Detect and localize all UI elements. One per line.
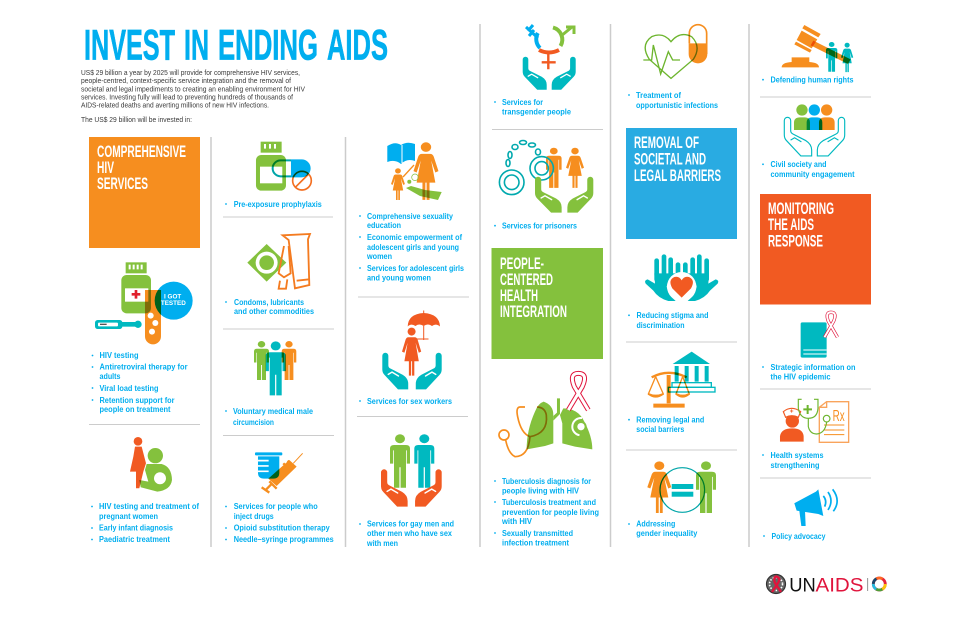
text: inject drugs list: Opioid substitution therapy [234, 524, 330, 532]
panel: comprehensive HIV services heading [89, 137, 200, 248]
icon: woman, child and book [387, 142, 442, 200]
panel: monitoring the AIDS response heading: THE AIDS [768, 215, 814, 234]
text: adolescent list [359, 212, 464, 282]
panel: people who inject drugs [225, 452, 334, 544]
icon: scales and courthouse [648, 352, 715, 408]
text: inject drugs list [225, 502, 334, 544]
text: condoms: and other commodities [234, 307, 314, 316]
icon: book and ribbon [801, 312, 837, 358]
text: transgender: transgender people [502, 108, 572, 116]
panel: people-centered health integration heading [492, 248, 603, 359]
panel: HIV testing [92, 262, 193, 414]
text: pre-exposure prophylaxis: Pre-exposure prophylaxis [234, 200, 322, 209]
icon: bottle, test tube and test: TESTED [161, 300, 186, 307]
text: gender inequality: gender inequality [636, 529, 698, 538]
icon: bottle, capsule and no sign [256, 142, 311, 191]
panel: prisoners [494, 140, 593, 230]
text: legal barriers: Removing legal and [636, 416, 704, 424]
title [84, 22, 388, 69]
icon: hands holding heart [645, 254, 718, 301]
panel: condoms and lubricants [225, 234, 314, 316]
text: circumcision [225, 407, 313, 427]
intro text: US$ 29 billion a year by 2025 will provide for comprehensive HIV services, [81, 68, 300, 77]
panel: monitoring the AIDS response heading: RESPONSE [768, 232, 823, 250]
panel: removal of societal and legal barriers heading: LEGAL BARRIERS [634, 166, 721, 185]
text: HIV testing list: adults [100, 372, 121, 381]
panel: gay men [359, 434, 454, 548]
panel: removal of societal and legal barriers heading: REMOVAL OF [634, 133, 699, 152]
text: circumcision: circumcision [233, 418, 274, 427]
icon: bottle, test tube and test: I GOT [164, 293, 181, 300]
text: HIV testing list: people on treatment [100, 405, 171, 414]
text: human rights: Defending human rights [770, 76, 854, 84]
panel: human rights [762, 25, 854, 85]
text: legal barriers: social barriers [636, 425, 685, 434]
text: civil society: Civil society and [770, 160, 827, 169]
panel: removal of societal and legal barriers heading: SOCIETAL AND [634, 150, 706, 168]
text: health systems: Health systems [770, 451, 824, 460]
panel: monitoring the AIDS response heading: MONITORING [768, 199, 834, 218]
text: gay men: with men [366, 539, 398, 548]
text: adolescent list: and young women [367, 274, 431, 282]
icon: megaphone [794, 489, 837, 526]
icon: bottle, test tube and test [95, 262, 193, 344]
icon: woman, man and equals sign [647, 461, 716, 513]
icon: two men in hands [381, 434, 442, 507]
intro text: services. Investing fully will lead to preventing hundreds of thousands of [81, 92, 294, 102]
text: gender inequality [628, 520, 698, 538]
panel: monitoring the AIDS response heading [760, 194, 871, 304]
text: sex workers: Services for sex workers [367, 397, 452, 406]
title: AIDS [327, 22, 388, 69]
panel: pre-exposure prophylaxis [225, 142, 322, 209]
text: adolescent list: women [366, 252, 392, 261]
text: HIV testing list: Viral load testing [100, 384, 159, 393]
text: TB and STI list: Tuberculosis diagnosis for [502, 477, 591, 486]
text: opportunistic infections: opportunistic infections [636, 101, 718, 110]
intro text [81, 68, 306, 124]
intro text: The US$ 29 billion will be invested in: [81, 115, 192, 124]
text: stigma: discrimination [636, 321, 685, 330]
text: health systems [762, 451, 824, 470]
text: opportunistic infections [628, 91, 718, 110]
text: HIV testing list: Retention support for [100, 396, 174, 405]
panel: strategic information [762, 312, 856, 382]
text: inject drugs list: inject drugs [234, 512, 274, 521]
logo wordmark: AIDS [816, 575, 864, 597]
panel: pregnant women and infants [91, 437, 199, 544]
panel: civil society [762, 104, 855, 179]
panel: comprehensive HIV services heading: COMPREHENSIVE [97, 142, 186, 161]
icon: UN emblem [766, 574, 786, 594]
icon: cup and syringe [255, 452, 303, 493]
text: TB and STI list: prevention for people living [502, 508, 599, 517]
panel: voluntary medical male circumcision [225, 341, 313, 427]
panel: gender inequality [628, 461, 716, 538]
text: condoms [225, 298, 314, 316]
text: policy advocacy: Policy advocacy [772, 532, 826, 541]
text: TB and STI list: Sexually transmitted [502, 529, 573, 538]
text: opportunistic infections: Treatment of [636, 91, 681, 100]
intro text: AIDS-related deaths and averting millions of new HIV infections. [81, 101, 269, 110]
text: pregnant women list: Early infant diagnosis [99, 524, 173, 532]
text: strategic information [762, 363, 856, 382]
text: pregnant women list: Paediatric treatment [99, 535, 170, 544]
text: TB and STI list [494, 477, 599, 548]
text: TB and STI list: infection treatment [502, 538, 569, 548]
text: transgender [494, 98, 572, 116]
text: transgender: Services for [502, 98, 543, 107]
icon: nurse, stethoscope and prescription: Rx [833, 408, 845, 425]
logo: UNAIDS [766, 574, 885, 597]
panel: health systems [762, 399, 849, 470]
text: adolescent list: Services for adolescent girls [367, 264, 464, 273]
text: circumcision: Voluntary medical male [233, 407, 313, 416]
text: inject drugs list: Services for people who [234, 502, 318, 511]
text: adolescent list: education [367, 221, 401, 230]
intro text: people-centred, context-specific service integration and the removal of [81, 76, 292, 85]
panel: opportunistic infections [628, 25, 718, 110]
panel: comprehensive HIV services heading: SERVICES [97, 174, 148, 193]
panel: people-centered health integration heading: PEOPLE- [500, 254, 544, 273]
icon: condom packet and tubes [247, 234, 310, 289]
text: stigma [628, 311, 709, 330]
panel: legal and social barriers [628, 352, 715, 434]
icon: lungs, stethoscope and ribbon [499, 373, 592, 457]
text: TB and STI list: Tuberculosis treatment and [502, 498, 596, 507]
text: gay men: Services for gay men and [367, 520, 454, 528]
logo wordmark [789, 575, 864, 597]
text: TB and STI list: people living with HIV [502, 486, 580, 496]
title: IN [184, 22, 209, 69]
icon: woman under umbrella in hands [382, 310, 442, 389]
text: gender inequality: Addressing [636, 520, 675, 528]
text: pregnant women list: HIV testing and treatment of [99, 502, 199, 511]
title: ENDING [218, 22, 318, 69]
text: civil society: community engagement [770, 170, 855, 179]
icon: gavel and people [782, 25, 853, 72]
intro text: societal and legal impediments to creating an enabling environment for HIV [81, 84, 306, 93]
text: stigma: Reducing stigma and [636, 311, 709, 320]
text: gay men: other men who have sex [367, 529, 453, 538]
text: HIV testing list: Antiretroviral therapy for [100, 362, 188, 372]
text: adolescent list: Economic empowerment of [367, 233, 462, 242]
text: TB and STI list: with HIV [501, 517, 533, 526]
text: HIV testing list: HIV testing [100, 351, 139, 360]
title: INVEST [84, 22, 175, 69]
text: health systems: strengthening [770, 461, 820, 470]
text: civil society [762, 160, 855, 179]
icon: mother and baby [130, 437, 172, 492]
icon: gender symbols in hands [523, 25, 576, 90]
text: adolescent list: adolescent girls and young [367, 243, 459, 252]
text: pregnant women list [91, 502, 199, 544]
panel: transgender people [494, 25, 576, 116]
icon: heart and capsule [643, 25, 707, 78]
panel: sex workers [359, 310, 452, 406]
panel: adolescent girls and young women [359, 142, 464, 282]
text: condoms: Condoms, lubricants [234, 298, 304, 307]
panel: removal of societal and legal barriers heading [626, 128, 737, 239]
icon: SDG ring [873, 578, 885, 590]
text: pregnant women list: pregnant women [99, 512, 158, 521]
panel: tuberculosis and STI [494, 373, 599, 548]
panel: comprehensive HIV services heading: HIV [97, 158, 114, 177]
text: prisoners: Services for prisoners [502, 222, 577, 230]
icon: three people in hands [784, 104, 845, 156]
text: HIV testing list [92, 351, 188, 414]
panel: people-centered health integration heading: HEALTH [500, 286, 538, 305]
text: strategic information: Strategic information on [770, 363, 856, 372]
text: gay men [359, 520, 454, 548]
text: strategic information: the HIV epidemic [770, 372, 831, 382]
text: legal barriers [628, 416, 704, 434]
logo wordmark: UN [789, 575, 816, 597]
panel: stigma and discrimination [628, 254, 718, 330]
panel: people-centered health integration heading: INTEGRATION [500, 302, 567, 321]
text: adolescent list: Comprehensive sexuality [367, 212, 453, 221]
icon: three men [254, 341, 296, 395]
text: inject drugs list: Needle–syringe programmes [234, 535, 334, 544]
panel: policy advocacy [763, 489, 837, 541]
icon: handcuffs, people and hands [499, 140, 593, 213]
panel: people-centered health integration heading: CENTERED [500, 270, 553, 289]
